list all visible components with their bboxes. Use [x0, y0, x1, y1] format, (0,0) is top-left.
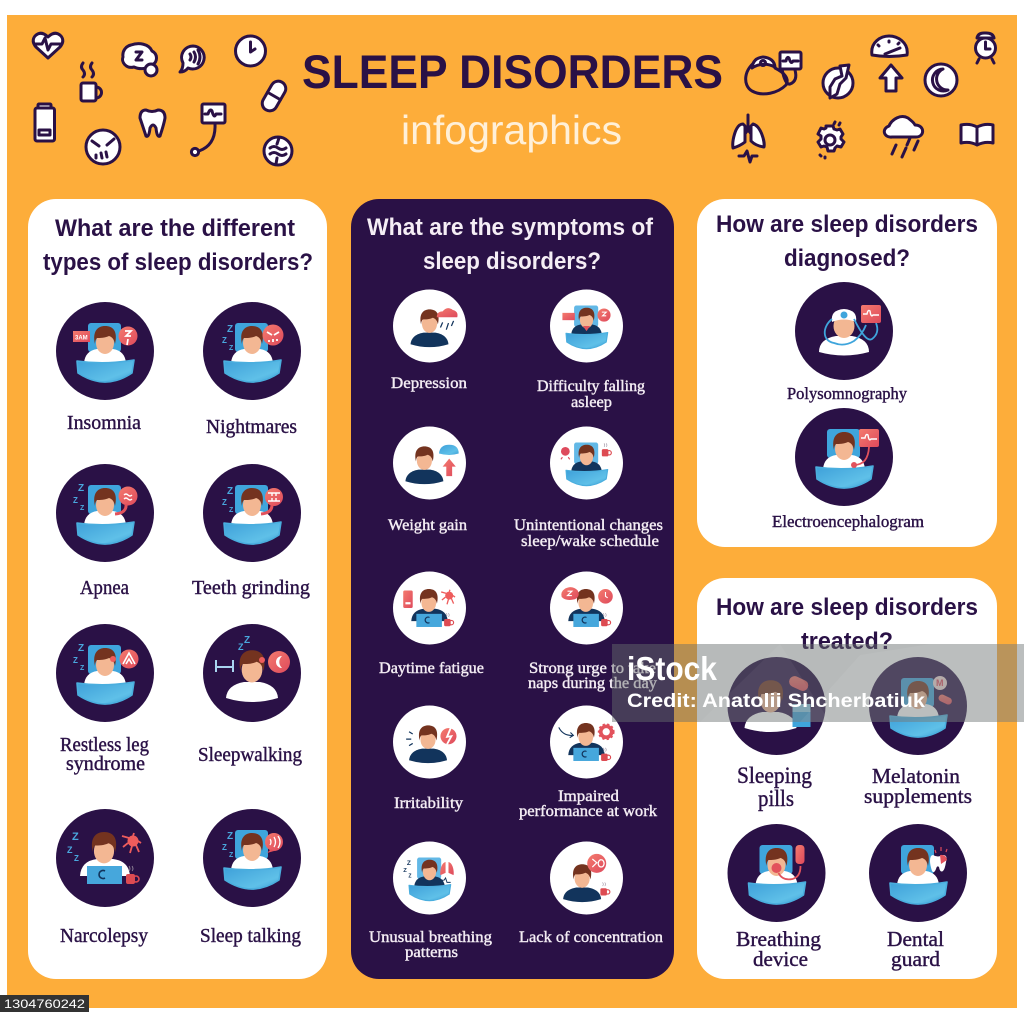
item: Breathing device: Breathing [736, 927, 822, 951]
heading: types: types of sleep disorders? [43, 249, 313, 276]
item: Nightmares: Z [229, 345, 234, 352]
item: Nightmares: Z [227, 324, 233, 335]
item: Unintentional changes: Unintentional changes [514, 517, 663, 534]
item: Teeth grinding: Z [227, 486, 233, 497]
icon: open book [961, 124, 993, 145]
item: Irritability: Irritability [394, 795, 463, 812]
heading: treatment: How are sleep disorders [716, 594, 978, 621]
item: Electroencephalogram [772, 408, 924, 531]
icon: nerve circle [264, 137, 292, 165]
item: Sleep talking [200, 809, 301, 947]
item: Strong urge to take naps: naps during the day [528, 675, 657, 692]
item: Insomnia [56, 302, 154, 434]
item: Melatonin supplements: supplements [864, 784, 972, 808]
item: Apnea: Z [78, 483, 84, 494]
icon: tooth [140, 110, 165, 136]
item: Lack of concentration: Lack of concentration [519, 929, 663, 946]
heading: symptoms: What are the symptoms of [367, 214, 654, 241]
item: Dental guard: Dental [887, 927, 944, 951]
item: Unusual breathing patterns [369, 842, 492, 961]
icon: crescent moon circle [925, 64, 957, 96]
item: Melatonin supplements [864, 657, 972, 808]
item: Restless leg syndrome: Z [73, 656, 78, 665]
heading: types [43, 215, 313, 276]
icon: sleep cloud [123, 44, 157, 76]
item: Insomnia: 3AM [75, 336, 88, 342]
item: Sleepwalking: Sleepwalking [198, 745, 302, 766]
item: Strong urge to take naps: Strong urge to take [529, 660, 656, 677]
item: Sleep talking: Z [227, 831, 233, 842]
item: Difficulty falling asleep [537, 290, 645, 411]
icon: polysomnography headset [746, 52, 801, 94]
item: Lack of concentration [519, 842, 663, 946]
item: Nightmares: Nightmares [206, 417, 297, 438]
item: Breathing device: device [753, 947, 808, 971]
item: Restless leg syndrome: syndrome [66, 754, 145, 775]
item: Dental guard: guard [891, 947, 940, 971]
watermark credit: Credit: Anatolii Shcherbatiuk [627, 691, 925, 712]
icon: gauge [872, 36, 907, 56]
heading: diagnosis [716, 211, 978, 272]
panel: types of sleep disorders [28, 199, 327, 979]
item: Daytime fatigue: Daytime fatigue [379, 660, 484, 677]
image id tag: 1304760242 [4, 997, 85, 1011]
item: Narcolepsy: Z [74, 854, 79, 863]
icon: up arrow [880, 65, 902, 91]
item: Impaired performance: performance at work [519, 803, 657, 820]
item: Narcolepsy: Narcolepsy [60, 926, 148, 947]
icon: lightning circle [823, 65, 853, 98]
item: Electroencephalogram: Electroencephalogram [772, 512, 924, 531]
item: Difficulty falling asleep: asleep [571, 394, 612, 411]
item: Nightmares [203, 302, 301, 438]
item: Narcolepsy: Z [67, 845, 73, 855]
heading: diagnosis: diagnosed? [784, 245, 910, 272]
icon: gear [818, 122, 844, 158]
item: Depression [391, 290, 467, 392]
item: Polysomnography: Polysomnography [787, 384, 908, 403]
watermark logo: iStock [627, 650, 718, 687]
panel: diagnosis [697, 199, 997, 547]
item: Sleep talking: Z [229, 852, 234, 859]
item: Apnea: Apnea [80, 578, 129, 599]
item: Sleeping pills: pills [758, 786, 794, 811]
item: Unusual breathing patterns: patterns [405, 944, 458, 961]
heading: types: What are the different [55, 215, 295, 242]
item: Apnea [56, 464, 154, 599]
item: Irritability [393, 706, 466, 812]
item: Teeth grinding: Z [222, 498, 227, 507]
icon: coffee cup [81, 63, 102, 101]
item: Restless leg syndrome: Restless leg [60, 735, 149, 756]
item: Depression: Depression [391, 375, 467, 392]
item: Breathing device [728, 824, 826, 971]
item: Nightmares: Z [222, 336, 227, 345]
header icons: left cluster [33, 33, 292, 165]
item: Daytime fatigue [379, 572, 484, 677]
item: Teeth grinding: Teeth grinding [192, 578, 310, 599]
item: Melatonin supplements: Melatonin [872, 764, 960, 788]
item: Narcolepsy [56, 809, 154, 947]
item: Sleepwalking [198, 624, 302, 766]
item: Teeth grinding [192, 464, 310, 599]
header icons: right cluster [733, 33, 996, 162]
item: Weight gain [388, 426, 467, 534]
item: Unintentional changes: sleep/wake schedule [521, 533, 659, 550]
icon: monitor with probe [191, 104, 225, 156]
image id tag [0, 995, 89, 1012]
item: Dental guard [869, 824, 967, 971]
item: Sleeping pills [728, 657, 826, 811]
subtitle: infographics [401, 107, 622, 153]
item: Sleeping pills: Sleeping [737, 763, 812, 788]
item: Sleepwalking: Z [238, 642, 244, 652]
item: Unusual breathing patterns: Z [408, 873, 411, 879]
heading: diagnosis: How are sleep disorders [716, 211, 978, 238]
watermark band [612, 644, 1024, 722]
icon: angry face [86, 130, 120, 164]
item: Apnea: Z [73, 496, 78, 505]
item: Strong urge to take naps [528, 572, 657, 692]
icon: pill [260, 78, 288, 114]
item: Polysomnography [787, 282, 908, 403]
item: Impaired performance: Impaired [558, 788, 619, 805]
icon: low battery [35, 104, 54, 141]
item: Restless leg syndrome [56, 624, 154, 775]
icon: speech bubble [180, 46, 204, 72]
item: Difficulty falling asleep: Difficulty falling [537, 378, 645, 395]
item: Insomnia: Insomnia [67, 413, 141, 434]
item: Sleepwalking: Z [244, 635, 250, 646]
icon: clock [236, 36, 266, 66]
item: Impaired performance [519, 706, 657, 820]
icon: lungs [733, 115, 764, 162]
title: SLEEP DISORDERS [302, 45, 723, 98]
icon: alarm clock [976, 33, 996, 63]
item: Restless leg syndrome: Z [80, 665, 85, 672]
item: Sleep talking: Sleep talking [200, 926, 301, 947]
heading: treatment: treated? [801, 628, 893, 655]
icon: heart pulse [33, 33, 63, 58]
item: Weight gain: Weight gain [388, 517, 467, 534]
heading: symptoms [367, 214, 654, 275]
panel: symptoms [351, 199, 674, 979]
item: Narcolepsy: Z [72, 831, 79, 843]
item: Melatonin supplements: M [936, 678, 944, 688]
item: Sleep talking: Z [222, 843, 227, 852]
item: Teeth grinding: Z [229, 507, 234, 514]
icon: rain cloud [884, 117, 923, 157]
item: Unusual breathing patterns: Unusual breathing [369, 929, 492, 946]
item: Unusual breathing patterns: Z [407, 860, 411, 867]
item: Restless leg syndrome: Z [78, 643, 84, 654]
heading: symptoms: sleep disorders? [423, 248, 601, 275]
item: Apnea: Z [80, 505, 85, 512]
panel: treatment [697, 578, 997, 979]
item: Unintentional changes [514, 426, 663, 550]
heading: treatment [716, 594, 978, 655]
item: Unusual breathing patterns: Z [403, 868, 407, 874]
